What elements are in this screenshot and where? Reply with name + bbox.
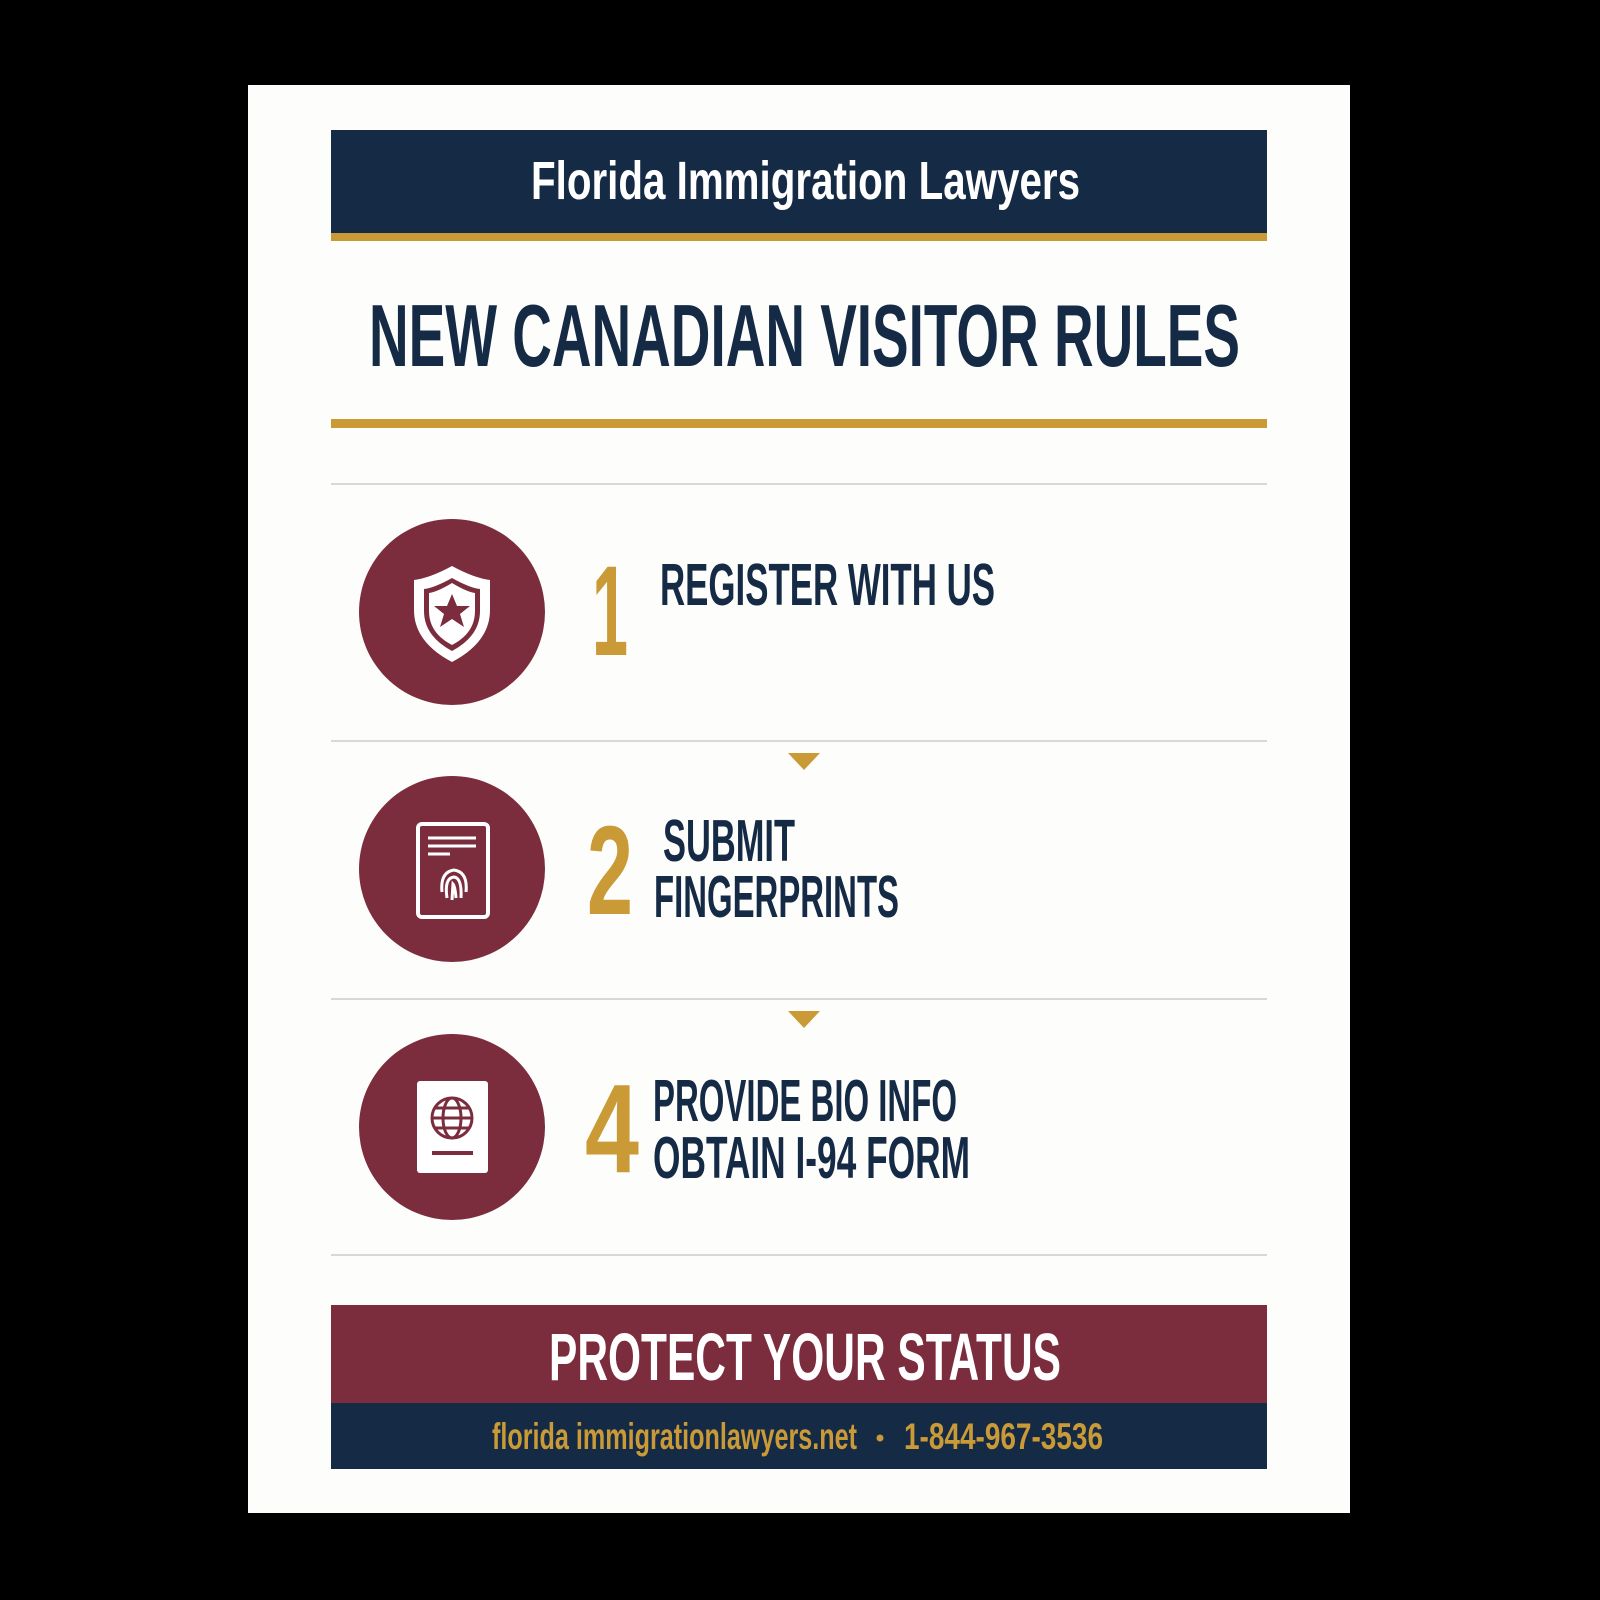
text: submit fingerprints: SUBMIT <box>663 808 795 874</box>
step 2 <box>359 776 899 962</box>
header banner <box>331 130 1267 241</box>
footer banner <box>331 1305 1267 1469</box>
number 1: 1 <box>592 540 628 683</box>
icon: shield <box>359 519 545 705</box>
step 2: FINGERPRINTS <box>654 864 899 930</box>
number 4: 4 <box>585 1058 639 1199</box>
step 4 <box>359 1034 970 1220</box>
text: register: REGISTER WITH US <box>660 552 995 618</box>
footer banner: 1-844-967-3536 <box>904 1416 1103 1457</box>
footer banner: florida immigrationlawyers.net <box>492 1416 857 1457</box>
number 2: 2 <box>587 800 633 941</box>
arrow 1 <box>788 753 820 770</box>
header banner: Florida Immigration Lawyers <box>531 151 1080 211</box>
step 4: OBTAIN I-94 FORM <box>653 1125 970 1191</box>
step 1 <box>359 519 995 705</box>
footer banner: PROTECT YOUR STATUS <box>549 1320 1061 1395</box>
icon: passport <box>359 1034 545 1220</box>
arrow 2 <box>788 1011 820 1028</box>
icon: fingerprint document <box>359 776 545 962</box>
text: provide bio info: PROVIDE BIO INFO <box>653 1068 957 1134</box>
card background <box>248 85 1350 1513</box>
